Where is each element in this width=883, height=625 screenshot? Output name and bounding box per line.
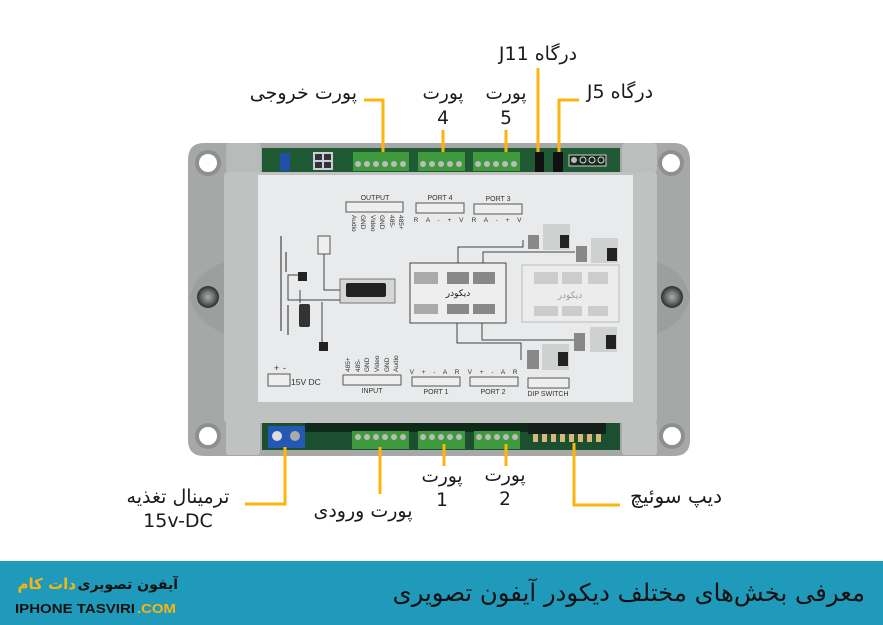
output block: OUTPUT [361, 195, 390, 202]
lid [224, 172, 657, 423]
leader: J5 [559, 100, 579, 152]
logo persian yellow: دات کام [18, 575, 76, 593]
monitor connector [340, 279, 395, 303]
bottom left ear [226, 422, 260, 455]
label: port 4: پورت [422, 83, 464, 104]
power block [268, 363, 321, 387]
input block: Video [374, 355, 381, 372]
input block [343, 355, 401, 395]
top right ear [622, 143, 657, 173]
label: port 5: پورت [485, 83, 527, 104]
label: port 4: 4 [437, 108, 449, 129]
port 2 terminal [474, 431, 520, 449]
label: port 1: پورت [421, 466, 463, 487]
output block: GND [378, 215, 385, 230]
decoder box [410, 263, 506, 323]
jumper block [313, 152, 333, 170]
connecting wires [457, 240, 575, 360]
label: port 5: 5 [500, 108, 512, 129]
dip switch block [527, 378, 569, 398]
four pin header [569, 155, 606, 166]
input port terminal [352, 431, 409, 449]
port 3 block: R A - + V [472, 217, 524, 224]
leader: port 4 [442, 130, 444, 152]
bottom board shadow [305, 423, 528, 432]
left side lobe with screw [190, 262, 225, 334]
port 2 block [468, 369, 520, 396]
label: J11: درگاه J11 [498, 42, 577, 65]
J5 header [553, 152, 563, 172]
output block: Audio [350, 215, 357, 232]
port 4 block: PORT 4 [427, 195, 453, 202]
port 3 block: PORT 3 [485, 196, 511, 203]
leader: port 1 [442, 444, 446, 466]
input block: GND [364, 357, 371, 372]
port 4 terminal [418, 152, 465, 171]
port 4 block: R A - + V [414, 217, 466, 224]
decoder box: دیکودر [445, 289, 470, 299]
power block: + [274, 363, 279, 373]
port 1 terminal [418, 431, 465, 449]
intercom unit bottom one [574, 327, 617, 352]
input block: Audio [393, 355, 400, 372]
power block: 15V DC [291, 377, 321, 387]
label: port 2: پورت [484, 465, 526, 486]
J11 header [535, 152, 544, 172]
label: input port: پورت ورودی [313, 500, 413, 522]
port 2 block: PORT 2 [480, 389, 506, 396]
label: dip switch: دیپ سوئیچ [630, 484, 722, 509]
mounting hole bottom left [195, 423, 221, 449]
leader: power terminal [245, 447, 285, 504]
label: power terminal: ترمینال تغذیه [127, 486, 229, 508]
port 2 block: V + - A R [468, 369, 520, 376]
small camera [298, 272, 307, 281]
mounting hole top right [658, 150, 684, 176]
mounting hole bottom right [659, 423, 685, 449]
intercom unit top two [576, 238, 618, 263]
input block: INPUT [362, 388, 383, 395]
port 1 block [410, 369, 462, 396]
port 3 block [472, 196, 524, 224]
faded decoder box: دیکودر [557, 291, 582, 301]
top circuit board [262, 148, 620, 173]
label: power terminal: 15v-DC [143, 510, 213, 532]
output block [346, 195, 404, 232]
small left notes [280, 236, 289, 335]
power block: - [283, 363, 286, 373]
leader: port 5 [504, 130, 508, 152]
device: decoder enclosure [188, 143, 690, 456]
logo latin yellow: .COM [137, 601, 176, 616]
right side lobe with screw [657, 262, 690, 334]
lock component [299, 304, 310, 327]
output block: 485- [388, 215, 395, 228]
paper label [258, 175, 633, 402]
output block: Video [369, 215, 376, 232]
small connector [318, 236, 330, 254]
left wiring [288, 254, 340, 342]
port 5 terminal [473, 152, 520, 171]
dip switch block: DIP SWITCH [527, 391, 569, 398]
output block: GND [359, 215, 366, 230]
input block: GND [384, 357, 391, 372]
input block: 485- [355, 359, 362, 372]
intercom unit top one [528, 224, 570, 250]
label: port 2: 2 [499, 489, 511, 510]
label: port 1: 1 [436, 490, 448, 511]
banner title: معرفی بخش‌های مختلف دیکودر آیفون تصویری [393, 578, 865, 607]
leader: port 2 [504, 444, 508, 466]
port 4 block [414, 195, 466, 224]
bottom circuit board [262, 422, 620, 450]
mounting hole top left [195, 150, 221, 176]
output port terminal [353, 152, 409, 171]
port 1 block: V + - A R [410, 369, 462, 376]
bell component [319, 342, 328, 351]
logo latin black: IPHONE TASVIRI [15, 601, 135, 616]
leader: input port [378, 447, 382, 494]
intercom unit bottom two [527, 344, 569, 370]
top left ear [226, 143, 261, 173]
banner background [0, 561, 883, 625]
input block: 485+ [345, 357, 352, 372]
logo [15, 575, 179, 616]
blue capacitor [280, 153, 290, 171]
label: output port: پورت خروجی [250, 82, 357, 104]
enclosure body [188, 143, 690, 456]
label: J5: درگاه J5 [586, 80, 653, 103]
power terminal [268, 426, 305, 448]
DIP switch [528, 423, 606, 442]
wiring diagram on label [268, 195, 619, 398]
bottom right ear [622, 422, 657, 455]
port 1 block: PORT 1 [423, 389, 449, 396]
leader: dip switch [574, 443, 620, 505]
logo persian black: آیفون تصویری [78, 575, 179, 593]
output block: 485+ [397, 215, 404, 230]
footer banner [0, 561, 883, 625]
leader: J11 [536, 68, 540, 152]
leader: output port [364, 100, 383, 152]
faded decoder box [522, 265, 619, 322]
